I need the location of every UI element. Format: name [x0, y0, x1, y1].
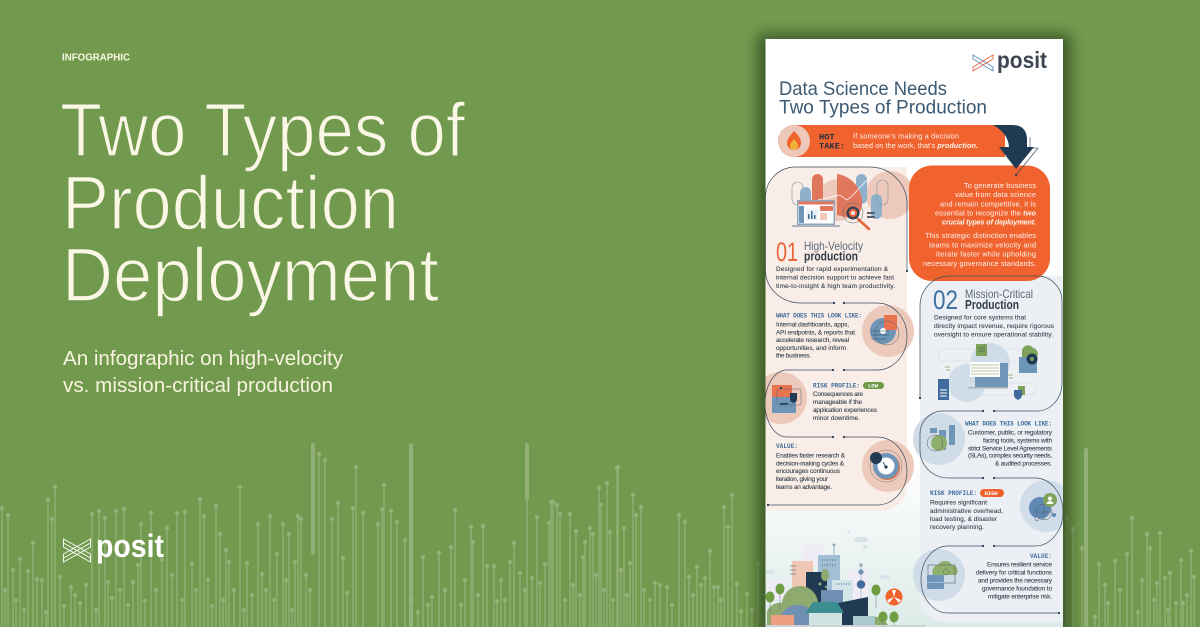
value right: VALUE:	[1030, 553, 1052, 560]
risk profile right: recovery planning.	[930, 524, 984, 531]
02 heading	[934, 290, 1032, 310]
risk profile right	[930, 489, 1004, 531]
what does this look like left: accelerate research, reveal	[776, 337, 849, 344]
what does this look like left: the business.	[776, 352, 811, 360]
main title: Deployment	[62, 233, 439, 318]
what does this look like right: (SLAs), complex security needs,	[968, 452, 1052, 460]
risk profile left	[813, 382, 884, 422]
icon: risk folder	[772, 385, 801, 413]
mission critical description: oversight to ensure operational stability.	[934, 332, 1053, 338]
value left	[776, 443, 846, 491]
value right: mitigate enterprise risk.	[988, 594, 1052, 600]
01 heading	[776, 242, 863, 263]
risk profile left: RISK PROFILE:	[813, 382, 860, 390]
risk profile right: administrative overhead,	[930, 508, 1003, 515]
icon: clock	[870, 450, 902, 482]
illustration: data science laptop	[792, 174, 888, 229]
mission critical description: directly impact revenue, require rigorous	[934, 323, 1054, 330]
card title: Two Types of Production	[779, 96, 987, 118]
value right	[976, 553, 1053, 600]
main title: Production	[62, 161, 399, 246]
illustration: cityscape	[765, 530, 926, 627]
value left: iteration, giving your	[776, 476, 829, 483]
infographic card	[755, 39, 1072, 627]
what does this look like left: Internal dashboards, apps,	[776, 322, 849, 328]
callout orange box: To generate business	[964, 181, 1036, 190]
risk profile left: Consequences are	[813, 391, 863, 398]
subtitle	[63, 347, 344, 397]
callout orange box	[909, 166, 1050, 281]
02 heading: Mission-Critical	[965, 287, 1033, 301]
value right: governance foundation to	[982, 586, 1052, 592]
posit logo white: posit	[96, 528, 164, 564]
callout orange box: value from data science	[955, 190, 1036, 199]
value left: VALUE:	[776, 443, 798, 450]
panel connector lines right	[920, 276, 1063, 613]
risk profile left: manageable if the	[813, 399, 862, 406]
hot take text: If someone's making a decision	[853, 132, 959, 140]
decorative spike chart background	[2, 445, 1194, 627]
what does this look like left: opportunities, and inform	[776, 345, 846, 352]
high velocity description: Designed for rapid experimentation &	[776, 266, 889, 273]
callout orange box: essential to recognize the two	[935, 208, 1037, 218]
card shadow	[757, 34, 1071, 627]
what does this look like left	[776, 312, 862, 360]
illustration: mission critical systems	[938, 343, 1038, 402]
icon: cloud server	[927, 561, 958, 589]
value left: decision-making cycles &	[776, 460, 845, 468]
panel connector lines left	[765, 167, 907, 505]
hot take label: TAKE:	[819, 142, 845, 152]
value right: Ensures resilient service	[987, 562, 1052, 568]
what does this look like right: strict Service Level Agreements	[968, 446, 1052, 452]
risk profile right: HIGH	[984, 490, 998, 497]
what does this look like right: Customer, public, or regulatory	[968, 430, 1053, 436]
callout orange box: iterate faster while upholding	[936, 250, 1036, 258]
callout orange box: necessary governance standards.	[923, 259, 1036, 268]
02 heading: 02	[933, 285, 958, 315]
posit logo white	[64, 528, 164, 564]
callout orange box: This strategic distinction enables	[925, 231, 1036, 240]
callout orange box: crucial types of deployment.	[942, 218, 1036, 226]
risk profile left: minor downtime.	[813, 415, 860, 422]
01 heading: production	[804, 250, 858, 264]
risk profile right: RISK PROFILE:	[930, 490, 977, 497]
card title	[779, 81, 986, 118]
risk profile left: application experiences	[813, 407, 877, 414]
what does this look like right: & audited processes.	[995, 460, 1052, 468]
main title	[60, 88, 466, 318]
hot take label	[819, 134, 844, 148]
panel: high-velocity background	[765, 167, 907, 511]
subtitle: An infographic on high-velocity	[63, 347, 344, 370]
callout orange box: teams to maximize velocity and	[929, 240, 1036, 250]
panel: mission-critical background	[920, 276, 1063, 622]
mission critical description	[934, 314, 1054, 338]
card logo: posit	[997, 47, 1047, 73]
what does this look like right: facing tools, systems with	[983, 438, 1052, 444]
hot take label: HOT	[819, 132, 835, 142]
high velocity description	[776, 266, 895, 290]
high velocity description: time-to-insight & high team productivity.	[776, 283, 895, 290]
icon circles	[755, 171, 1072, 601]
value left: Enables faster research &	[776, 452, 846, 460]
icon: compliance bars	[927, 425, 955, 451]
hot take text: based on the work, that's production.	[853, 141, 978, 150]
what does this look like left: WHAT DOES THIS LOOK LIKE:	[776, 312, 862, 320]
value right: and provides the necessary	[978, 578, 1053, 584]
risk profile right: load testing, & disaster	[930, 516, 998, 523]
value left: encourages continuous	[776, 468, 840, 475]
icon: network globe	[1029, 493, 1057, 521]
02 heading: Production	[965, 298, 1019, 312]
callout orange box: and remain competitive, it is	[940, 200, 1036, 208]
what does this look like right	[965, 420, 1053, 468]
connector dots left	[767, 270, 908, 506]
hot take banner	[778, 125, 1005, 157]
eyebrow label: INFOGRAPHIC	[62, 52, 130, 64]
connector dots right	[919, 397, 1060, 614]
arrow: hot take down	[993, 125, 1038, 176]
01 heading: 01	[776, 237, 798, 267]
card title: Data Science Needs	[779, 78, 947, 100]
risk profile left: LOW	[868, 382, 879, 390]
icon: flame	[778, 125, 810, 157]
what does this look like left: API endpoints, & reports that	[776, 330, 855, 336]
high velocity description: internal decision support to achieve fast	[776, 274, 894, 282]
what does this look like right: WHAT DOES THIS LOOK LIKE:	[965, 420, 1052, 428]
value right: delivery for critical functions	[976, 570, 1052, 576]
subtitle: vs. mission-critical production	[63, 374, 333, 397]
hot take text	[853, 133, 978, 150]
01 heading: High-Velocity	[804, 239, 863, 253]
mission critical description: Designed for core systems that	[934, 314, 1026, 322]
icon: dashboard pie	[870, 315, 899, 345]
main title: Two Types of	[60, 88, 466, 173]
card logo	[972, 51, 1047, 73]
risk profile right: Requires significant	[930, 500, 987, 506]
value left: teams an advantage.	[776, 484, 832, 491]
